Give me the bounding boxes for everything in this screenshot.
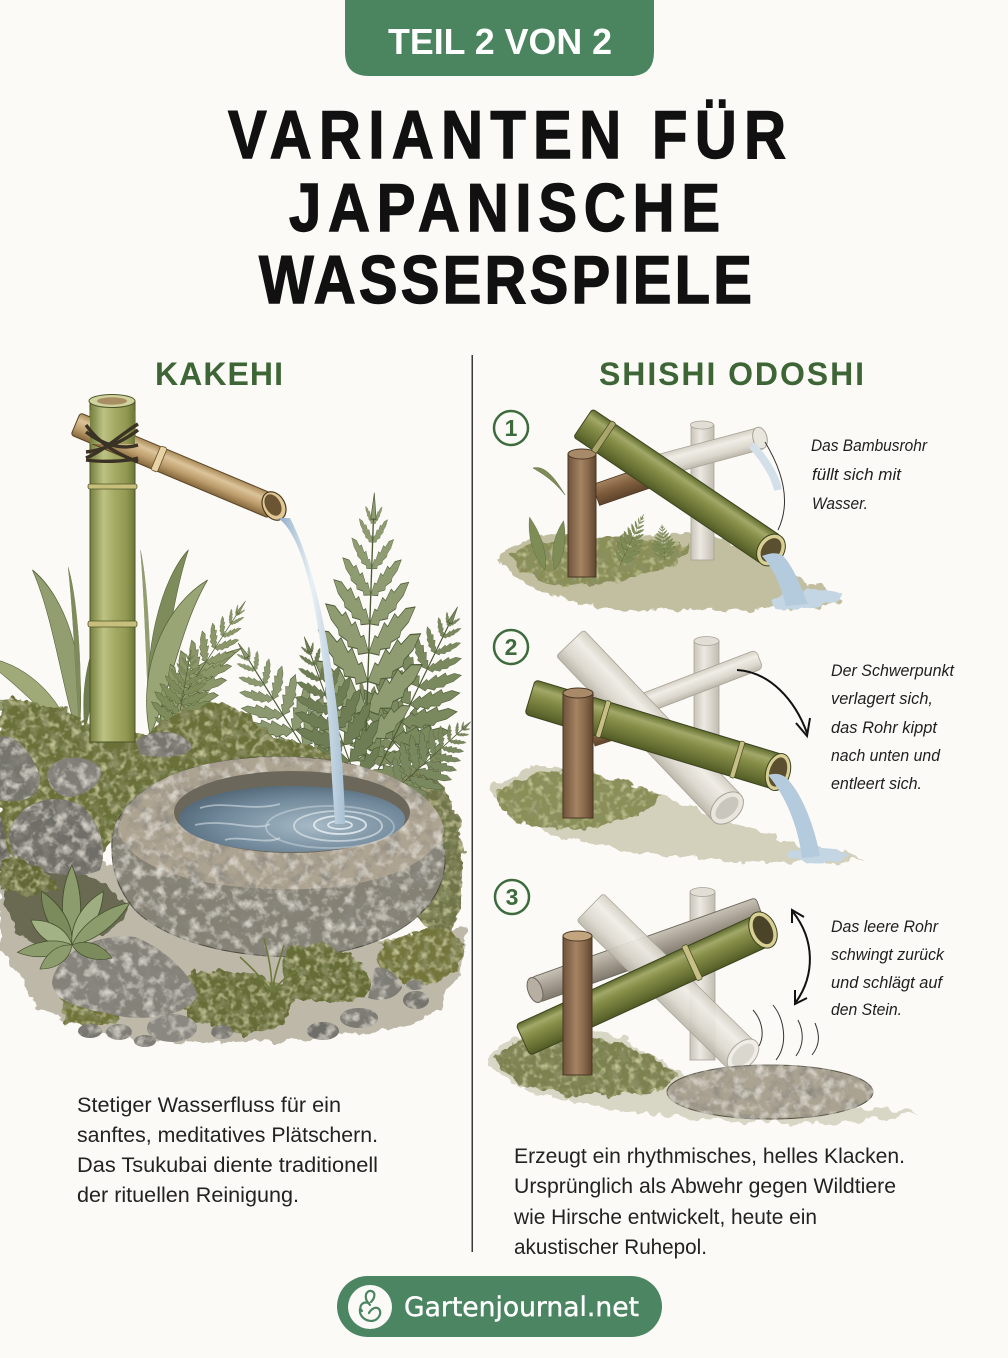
step 2 number badge: 2 (505, 634, 517, 660)
icon: sprout logo (348, 1285, 392, 1329)
ghost pipe position (556, 630, 750, 831)
title: VARIANTEN FÜR (228, 98, 786, 173)
footer brand pill: Gartenjournal.net (404, 1292, 639, 1323)
text block: Shishi Odoshi description: wie Hirsche entwickelt, heute ein (513, 1206, 817, 1229)
text block: Kakehi description: Stetiger Wasserfluss für ein (77, 1094, 341, 1117)
water puddle (772, 589, 842, 609)
step 1 number badge (494, 411, 528, 445)
water outflow (762, 553, 808, 606)
ground (497, 534, 842, 610)
grass (523, 468, 678, 572)
text block: Kakehi description: sanftes, meditatives Plätschern. (77, 1124, 378, 1147)
step 1 number badge: 1 (505, 415, 518, 441)
caption step 2: verlagert sich, (831, 690, 933, 708)
ground (490, 768, 862, 863)
wood post (568, 449, 596, 577)
column divider (472, 355, 473, 1252)
text block: Kakehi description: der rituellen Reinigung. (77, 1184, 299, 1207)
water stream (278, 518, 345, 824)
text block: Kakehi description (77, 1094, 378, 1207)
ghost pipe position (577, 893, 765, 1077)
ground (488, 1028, 920, 1123)
caption step 2: nach unten und (831, 747, 941, 765)
title: WASSERSPIELE (259, 243, 752, 318)
fern: large right fronds (197, 491, 504, 820)
top tab: part label: TEIL 2 VON 2 (388, 21, 612, 62)
bottom rocks and pebbles (52, 936, 429, 1047)
step 2 number badge (494, 630, 528, 664)
moss mound left (0, 699, 350, 885)
bamboo post (88, 394, 137, 742)
text block: Kakehi description: Das Tsukubai diente traditionell (77, 1154, 378, 1177)
caption step 2: das Rohr kippt (831, 719, 938, 737)
water outflow (768, 774, 820, 858)
caption step 1: füllt sich mit (812, 466, 902, 484)
green bamboo pipe (525, 679, 795, 794)
dark ground under plants (0, 864, 125, 943)
illustration: step 1 bamboo fills with water (497, 408, 842, 610)
wood post (563, 931, 592, 1075)
green bamboo pipe (573, 408, 791, 571)
caption step 3 (831, 918, 945, 1019)
pale gravel ground (0, 856, 466, 1042)
caption step 1: Das Bambusrohr (811, 437, 928, 455)
caption step 3: und schlägt auf (831, 974, 944, 992)
moss patches front (0, 857, 463, 1035)
illustration: step 2 pipe tips and empties (490, 630, 862, 863)
puddle (785, 848, 850, 863)
grey crossbar (531, 898, 765, 1002)
caption step 2: Der Schwerpunkt (831, 662, 955, 680)
caption step 3: Das leere Rohr (831, 918, 939, 936)
caption step 3: den Stein. (831, 1001, 902, 1019)
rocks left (0, 732, 192, 875)
caption step 3: schwingt zurück (831, 946, 945, 964)
caption step 1: Wasser. (812, 495, 868, 513)
small plant lower left (16, 865, 134, 976)
text block: Shishi Odoshi description (513, 1145, 905, 1259)
caption step 2: entleert sich. (831, 775, 922, 793)
bamboo spout (71, 410, 291, 524)
text block: Shishi Odoshi description: Ursprünglich als Abwehr gegen Wildtiere (514, 1175, 896, 1198)
step 3 number badge: 3 (506, 884, 518, 910)
ghost rear post and pipe (647, 421, 770, 560)
illustration: step 3 pipe swings back onto stone (488, 888, 920, 1123)
title (228, 98, 786, 318)
title: JAPANISCHE (289, 171, 720, 246)
water surface (179, 786, 405, 852)
footer brand pill (337, 1276, 662, 1337)
caption step 2 (831, 662, 955, 793)
wood post (563, 688, 593, 818)
plants left of and around post (0, 550, 271, 764)
grass tuft (240, 938, 296, 992)
text block: Shishi Odoshi description: akustischer Ruhepol. (514, 1236, 707, 1259)
wood bar stub (589, 720, 625, 747)
top tab: part label (345, 0, 654, 76)
green bamboo pipe (515, 907, 783, 1057)
rope binding (86, 424, 138, 462)
heading: Kakehi: KAKEHI (155, 356, 283, 392)
ghost rear post (690, 888, 715, 1060)
text block: Shishi Odoshi description: Erzeugt ein rhythmisches, helles Klacken. (514, 1145, 905, 1168)
background greenery behind basin (395, 768, 463, 945)
sound arcs (753, 1005, 818, 1060)
stone slab (667, 1065, 873, 1119)
heading: Shishi Odoshi: SHISHI ODOSHI (599, 356, 864, 392)
ghost rear post and bar (636, 636, 763, 736)
caption step 1 (811, 437, 928, 513)
step 3 number badge (495, 880, 529, 914)
curved tipping arrow (737, 670, 810, 736)
wood crossbar (592, 466, 653, 505)
ghost water arc (752, 442, 784, 530)
double-headed swing arrow (792, 910, 810, 1004)
stone basin (112, 757, 445, 957)
illustration: Kakehi bamboo spout with stone basin (0, 394, 504, 1047)
